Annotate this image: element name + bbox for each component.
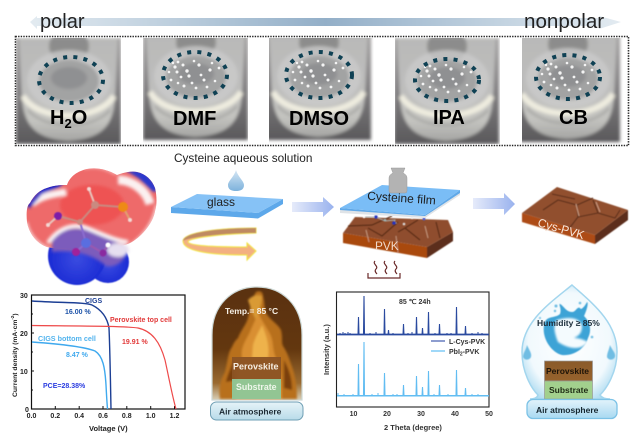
photo: CB vial: CB (559, 107, 588, 129)
chart: J-V curves (10, 293, 185, 433)
label: Cys-PVK: Cys-PVK (536, 215, 586, 242)
label: test condition: 85 ℃ 24h (399, 298, 431, 306)
x axis labels (350, 411, 493, 418)
axis title: intensity: Intensity (a.u.) (322, 324, 331, 375)
curve: CIGS (32, 301, 111, 409)
layer: substrate (544, 381, 592, 399)
XRD trace: L-Cys-PVK (337, 296, 489, 335)
label: perovskite: Perovskite (546, 366, 589, 376)
base: air atmosphere (210, 402, 303, 420)
axis title: current density: Current density (mA·cm (12, 320, 19, 397)
photo: DMF vial: DMF (173, 108, 216, 130)
layer: perovskite (544, 361, 592, 381)
x axis ticks and labels: 0.0 (27, 413, 36, 420)
molecule electrostatic potential surface (26, 168, 156, 286)
photo: DMSO vial: DMSO (289, 108, 349, 130)
molecule ball and stick model (46, 187, 132, 256)
splash interior highlight (554, 318, 588, 348)
XRD trace: PbI2-PVK (337, 342, 489, 396)
curve: CIGS bottom cell (32, 342, 108, 409)
surface lower lobes (48, 227, 129, 285)
axis title: voltage: Voltage (V) (89, 424, 128, 433)
surface upper body (26, 168, 156, 250)
x axis labels: 40 (451, 411, 459, 418)
photo: H2O vial: H (50, 107, 64, 129)
base: air atmosphere (527, 400, 617, 418)
curve labels: 8.47 % (66, 352, 89, 359)
purple transition and white rim over lower lobes (48, 226, 129, 266)
curve labels: Perovskite top cell (110, 317, 172, 324)
glass plate (171, 194, 283, 218)
label: PVK: PVK (375, 239, 399, 253)
photo: H2O vial: O (72, 107, 87, 129)
curve: perovskite top cell (32, 326, 176, 409)
splash (544, 302, 590, 355)
label: nonpolar: nonpolar (524, 10, 604, 33)
label: cysteine film: Cysteine film (367, 189, 436, 207)
photo: CB vial (522, 38, 622, 144)
x axis ticks and labels: 0.2 (50, 413, 60, 420)
arrow: step 1 to step 2 (292, 197, 334, 217)
y axis ticks and labels: 0 (25, 407, 29, 414)
y axis ticks and labels: 30 (20, 293, 28, 300)
cysteine molecules between film and PVK (363, 215, 425, 225)
label: substrate: Substrate (549, 385, 588, 395)
layer: perovskite (232, 357, 281, 379)
x axis ticks and labels: 0.6 (98, 413, 108, 420)
photo: H2O vial (16, 29, 121, 144)
y axis ticks and labels (20, 293, 34, 414)
y axis ticks and labels: 10 (20, 369, 28, 376)
icon: heater (368, 261, 400, 278)
label: perovskite: Perovskite (233, 362, 279, 372)
label: humidity: Humidity ≥ 85% (537, 318, 600, 328)
PVK block under film (343, 216, 453, 258)
icon: weight (389, 168, 407, 193)
panel: humidity stability droplet (522, 285, 617, 418)
chart: XRD patterns (322, 292, 493, 432)
x axis labels: 10 (350, 411, 357, 418)
dotted frame around solvent photos (16, 36, 628, 146)
curve labels: CIGS (85, 298, 102, 305)
label: temperature: Temp.= 85 °C (225, 306, 278, 316)
axis title: current density: -2 (10, 315, 15, 320)
legend: -PVK (463, 349, 479, 356)
label: substrate: Substrate (236, 382, 277, 392)
curve labels: PCE=28.38% (43, 383, 86, 390)
label: glass: glass (207, 195, 235, 209)
photo: IPA vial: IPA (433, 107, 465, 129)
step 1 label: cysteine aqueous solution: Cysteine aqueous solution (174, 151, 312, 165)
x axis ticks and labels: 0.4 (74, 413, 84, 420)
label: air atmosphere: Air atmosphere (219, 406, 282, 416)
label: air atmosphere: Air atmosphere (536, 405, 599, 415)
flames (219, 291, 297, 399)
splash droplets (523, 302, 615, 360)
curve labels: CIGS bottom cell (38, 334, 96, 343)
curve labels (38, 298, 172, 390)
x axis ticks and labels: 0.8 (122, 413, 132, 420)
photo: H2O vial: 2 (64, 116, 72, 131)
cysteine film plate (340, 185, 460, 218)
x axis labels: 30 (417, 411, 425, 418)
Cys-PVK block (522, 187, 628, 244)
icon: water drop (228, 170, 244, 191)
x axis labels: 50 (485, 411, 493, 418)
curve labels: 16.00 % (65, 309, 91, 316)
photo: IPA vial (394, 29, 499, 144)
legend: PbI (449, 349, 460, 356)
photo: DMSO vial (266, 25, 371, 140)
arrow: step 2 to step 3 (473, 193, 515, 215)
y axis ticks and labels: 20 (20, 331, 28, 338)
photo: DMF vial (143, 25, 248, 140)
legend: L-Cys-PVK (449, 339, 485, 346)
legend: 2 (460, 352, 463, 358)
x axis ticks and labels: 1.2 (170, 413, 179, 420)
polarity arrow (30, 10, 621, 33)
legend (431, 339, 485, 358)
axis title: 2 theta: 2 Theta (degree) (384, 423, 442, 432)
x axis labels: 20 (383, 411, 391, 418)
x axis ticks and labels: 1.0 (146, 413, 156, 420)
x axis ticks and labels (27, 406, 179, 420)
curve labels: 19.91 % (122, 339, 148, 346)
panel: thermal stability dome (210, 287, 303, 420)
label: polar: polar (40, 11, 85, 33)
layer: substrate (232, 379, 281, 399)
axis title: current density: ) (12, 313, 19, 316)
spin coating arrow (183, 228, 256, 260)
